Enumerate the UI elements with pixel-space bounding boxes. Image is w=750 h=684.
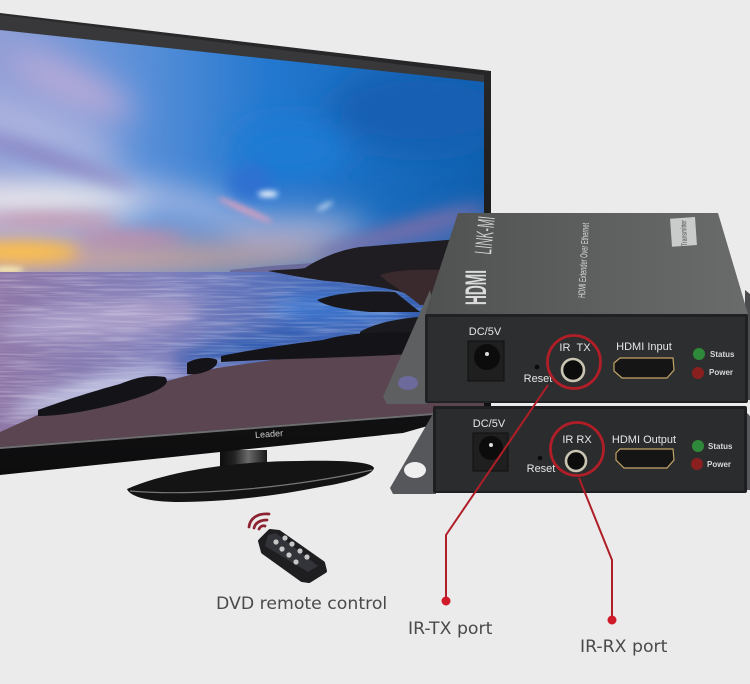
lower bracket slot — [404, 462, 426, 478]
IR TX jack — [562, 359, 584, 381]
upper left mounting bracket — [383, 290, 432, 404]
lower front panel: HDMI Output — [612, 434, 676, 446]
text: LINK-MI — [470, 215, 501, 256]
shoreline rocks — [38, 376, 167, 416]
upper front panel: HDMI Input — [616, 341, 672, 353]
lower front panel: DC/5V — [473, 418, 506, 430]
callout: IR-RX — [550, 422, 668, 657]
remote control — [249, 514, 325, 581]
callout: IR-RX: IR-RX port — [580, 637, 668, 657]
TV stand — [127, 450, 374, 502]
stand neck — [220, 450, 267, 470]
status LEDs — [692, 348, 735, 379]
horizon glow — [0, 244, 360, 272]
DC jack — [473, 433, 508, 471]
wave texture — [0, 274, 430, 424]
IR RX jack — [566, 451, 586, 471]
device stack: HDMI extender: HDMI — [460, 270, 493, 305]
sand beach — [0, 354, 484, 447]
device stack: HDMI extender — [383, 213, 750, 494]
label: DVD remote control: DVD remote control — [216, 594, 387, 614]
icon: infrared waves — [249, 514, 269, 529]
lower front panel: IR RX — [562, 434, 592, 446]
DC jack — [468, 341, 504, 381]
reset: Reset — [527, 463, 555, 475]
top panel of transmitter — [425, 213, 748, 314]
sky — [0, 20, 490, 275]
TV monitor — [0, 13, 510, 475]
upper front panel — [425, 314, 748, 403]
remote body — [260, 531, 325, 581]
near rocks — [317, 291, 420, 312]
product name: HDMI Extender Over Ethernet — [577, 223, 592, 298]
reset: Reset — [524, 373, 552, 385]
transmitter label: Transmitter — [679, 220, 689, 246]
status LEDs — [691, 440, 733, 470]
bracket slot — [398, 376, 418, 390]
TV brand: Leader: Leader — [255, 428, 283, 440]
callout: IR-TX: IR-TX port — [408, 619, 493, 639]
transmitter label — [670, 217, 697, 247]
lower left mounting bracket — [390, 412, 436, 494]
upper front panel: DC/5V — [469, 326, 502, 338]
reset — [527, 456, 555, 475]
lower front panel — [433, 406, 747, 493]
distant hills — [230, 263, 320, 272]
status LEDs: Status — [710, 350, 735, 359]
status LEDs: Status — [708, 442, 733, 451]
HDMI input port — [614, 358, 674, 378]
TV screen — [0, 20, 510, 450]
TV bezel — [0, 13, 491, 475]
cliff headland — [268, 240, 450, 293]
stand base — [127, 461, 374, 502]
sea — [0, 272, 424, 432]
remote buttons — [273, 535, 310, 565]
status LEDs: Power — [709, 368, 733, 377]
TV bottom highlight — [0, 409, 484, 449]
status LEDs: Power — [707, 460, 731, 469]
right brackets — [745, 290, 750, 400]
reset — [524, 365, 552, 385]
upper front panel: IR TX — [559, 342, 591, 354]
HDMI output port — [616, 449, 674, 468]
callout: IR-TX — [408, 336, 600, 639]
